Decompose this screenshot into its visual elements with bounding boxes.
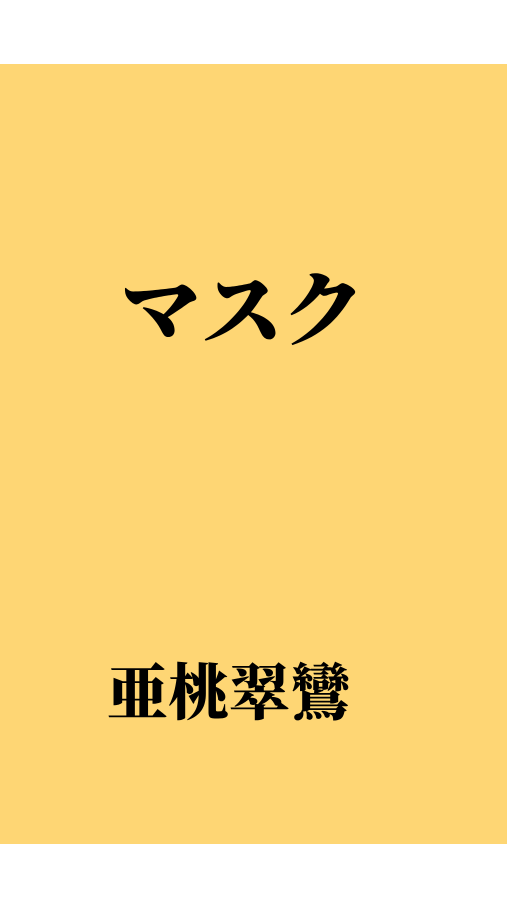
title: マスク (120, 246, 365, 363)
author name: 亜桃翠鸞 (107, 645, 351, 732)
